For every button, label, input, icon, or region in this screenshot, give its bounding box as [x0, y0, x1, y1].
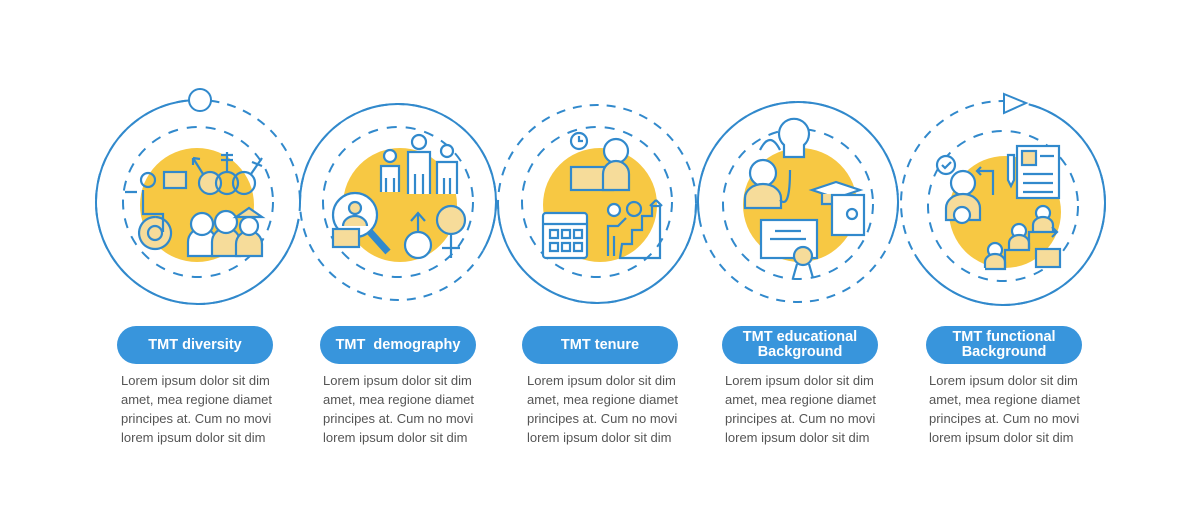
icon: education — [745, 119, 864, 278]
text block 3: Lorem ipsum dolor sit dim amet, mea regione diamet principes at. Cum no movi lorem ipsum dolor sit dim — [527, 373, 678, 445]
icon: tenure — [543, 133, 662, 258]
icon: functional — [937, 146, 1060, 269]
text block 5: Lorem ipsum dolor sit dim amet, mea regione diamet principes at. Cum no movi lorem ipsum dolor sit dim — [929, 373, 1080, 445]
text block 1: Lorem ipsum dolor sit dim amet, mea regione diamet principes at. Cum no movi lorem ipsum dolor sit dim — [121, 373, 272, 445]
label: TMT tenure: TMT tenure — [561, 337, 639, 353]
label: TMT diversity: TMT diversity — [148, 337, 242, 353]
label: TMT functional Background — [926, 326, 1082, 364]
circle 5: TMT functional background — [878, 78, 1128, 328]
circle 3: TMT tenure — [498, 105, 696, 303]
text block 4: Lorem ipsum dolor sit dim amet, mea regione diamet principes at. Cum no movi lorem ipsum dolor sit dim — [725, 373, 876, 445]
label: TMT diversity — [117, 326, 273, 364]
diagram: circles with icons — [95, 88, 1106, 306]
text block 2: Lorem ipsum dolor sit dim amet, mea regione diamet principes at. Cum no movi lorem ipsum dolor sit dim — [323, 373, 474, 445]
circle 4: TMT educational background — [682, 86, 914, 318]
label: TMT educational Background: TMT educational — [743, 329, 857, 345]
icon: diversity — [125, 152, 262, 256]
circle 2: TMT demography — [300, 104, 496, 300]
label: TMT demography — [320, 326, 476, 364]
label: TMT functional Background: Background — [962, 344, 1046, 360]
icon: demography — [333, 135, 465, 258]
label: TMT tenure — [522, 326, 678, 364]
label: TMT educational Background — [722, 326, 878, 364]
label: TMT functional Background: TMT functional — [952, 329, 1056, 345]
label: TMT educational Background: Background — [758, 344, 842, 360]
label: TMT demography: TMT demography — [336, 337, 460, 353]
circle 1: TMT diversity — [80, 84, 316, 320]
